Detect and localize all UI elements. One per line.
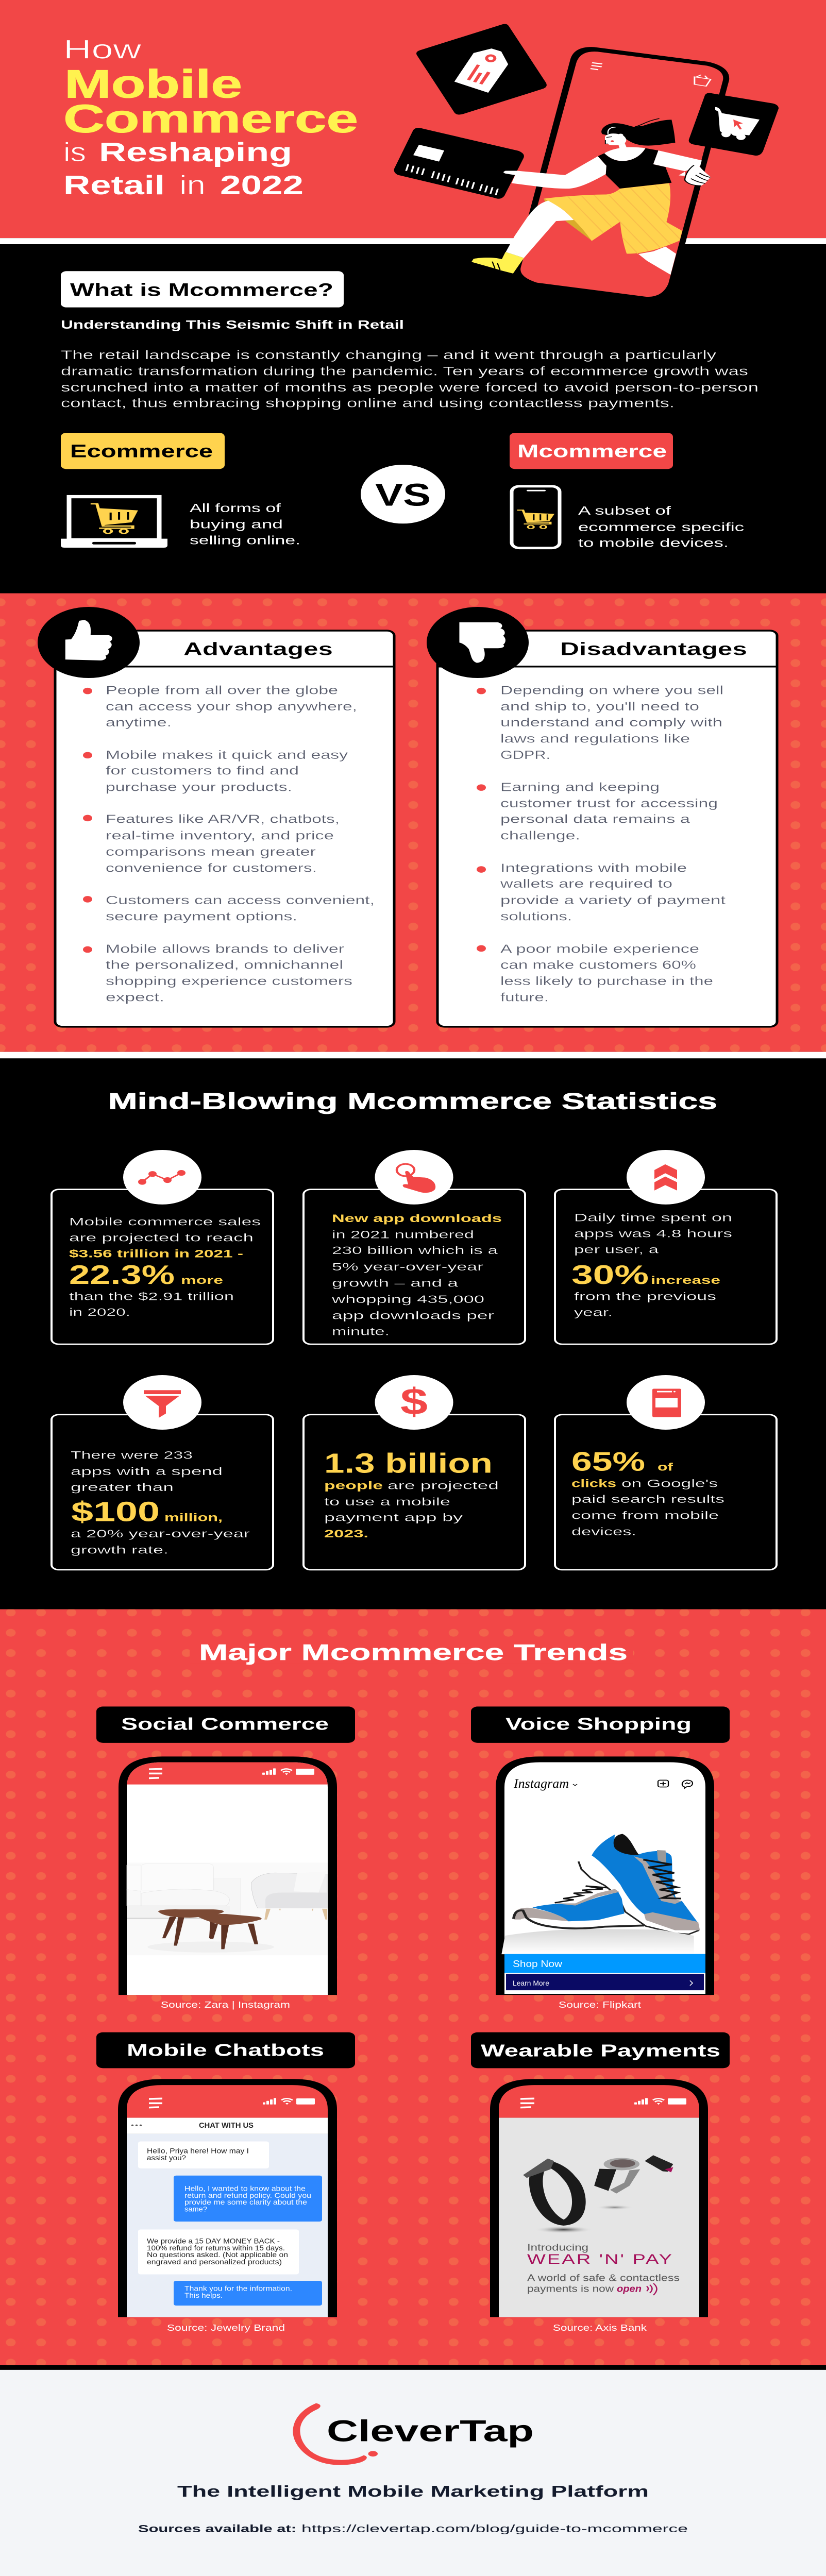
chat header <box>131 2125 133 2126</box>
phone mockup: A world of safe & contactless <box>527 2273 680 2283</box>
panel: disadvantages <box>427 607 777 1027</box>
mcommerce column: Mcommerce <box>517 442 667 461</box>
phone mockup: CHAT WITH US <box>199 2121 254 2129</box>
panel: footer <box>0 2370 826 2576</box>
stat card: daily time: per user, a <box>574 1243 659 1256</box>
skirt inner fold <box>544 199 592 241</box>
logo: clevertap: CleverTap <box>327 2414 534 2448</box>
bullet list: customer trust for accessing <box>500 797 718 810</box>
stat card: sales: than the $2.91 trillion <box>69 1290 234 1302</box>
description <box>578 504 744 550</box>
mcommerce column <box>510 433 744 550</box>
chat bubble 2: return and refund policy. Could you <box>184 2192 311 2199</box>
phone mockup: WEAR 'N' PAY <box>527 2251 672 2267</box>
intro paragraph: scrunched into a matter of months as people were forced to avoid person-to-person <box>61 381 758 394</box>
stat card: app downloads: 230 billion which is a <box>332 1244 498 1257</box>
shop now bar <box>504 1954 705 1973</box>
stat card: sales: in 2020. <box>69 1306 130 1318</box>
chat bubble 1 <box>138 2142 269 2168</box>
bullet list: understand and comply with <box>500 716 722 730</box>
arm holding card <box>503 156 606 189</box>
stat card: apps with spend <box>52 1375 273 1570</box>
stat card: sales: Mobile commerce sales <box>69 1215 261 1228</box>
description: All forms of <box>190 502 281 515</box>
label: Wearable Payments <box>481 2041 720 2060</box>
icon: menu <box>149 1768 162 1779</box>
photo: wearables <box>523 2155 673 2233</box>
chat bubble 3: engraved and personalized products) <box>147 2258 282 2266</box>
title: Reshaping <box>99 137 292 167</box>
woman running <box>471 118 711 275</box>
sources line: https://clevertap.com/blog/guide-to-mcommerce <box>301 2523 688 2535</box>
face <box>605 133 626 145</box>
label <box>471 1706 730 1743</box>
price tag card <box>416 24 547 115</box>
chat bubble 3: 100% refund for returns within 15 days. <box>147 2244 285 2252</box>
description: A subset of <box>578 504 671 518</box>
icon: dollar sign <box>375 1375 453 1430</box>
skirt <box>544 183 682 254</box>
stat card: apps with spend: a 20% year-over-year <box>71 1528 250 1540</box>
intro paragraph: contact, thus embracing shopping online and using contactless payments. <box>61 396 675 410</box>
bullet list: Customers can access convenient, <box>106 894 375 907</box>
bullet list: laws and regulations like <box>500 732 690 745</box>
title: is <box>63 137 86 167</box>
stat card: apps with spend: $100 <box>71 1497 160 1528</box>
stat card: sales <box>52 1150 273 1344</box>
heading: Disadvantages <box>560 639 747 659</box>
heading: Major Mcommerce Trends <box>199 1639 628 1665</box>
ecommerce column: Ecommerce <box>70 442 213 461</box>
bullet list: solutions. <box>500 910 572 923</box>
chat bubble 2 <box>174 2176 322 2222</box>
icon: thumbs up <box>38 607 140 678</box>
reflection <box>501 1929 694 1954</box>
bullet list: future. <box>500 991 549 1004</box>
bullet list: personal data remains a <box>500 812 690 826</box>
description: buying and <box>190 518 283 531</box>
phone mockup: open <box>617 2283 642 2294</box>
title: 2022 <box>220 170 304 200</box>
stat card: daily time: 30% <box>571 1260 649 1290</box>
phone mockup: payments is now <box>527 2283 614 2294</box>
panel: hero <box>0 0 826 301</box>
trend: wearable payments <box>471 2032 730 2333</box>
stat card: app downloads: New app downloads <box>332 1212 502 1225</box>
bullet list: convenience for customers. <box>106 861 317 875</box>
description: to mobile devices. <box>578 536 729 550</box>
chat bubble 3 <box>138 2229 299 2274</box>
icon: line chart <box>123 1150 201 1205</box>
phone mockup <box>119 1756 337 1995</box>
icon: menu <box>149 2098 162 2108</box>
panel: what is mcommerce <box>61 271 758 550</box>
chat bubble 1: assist you? <box>147 2154 186 2162</box>
bullet list: Earning and keeping <box>500 781 660 794</box>
chat bubble 3: No questions asked. (Not applicable on <box>147 2251 288 2259</box>
heading: Mind-Blowing Mcommerce Statistics <box>108 1088 717 1114</box>
trend: social commerce <box>96 1706 355 2010</box>
vs badge: VS <box>375 477 431 513</box>
phone mockup: Introducing <box>527 2242 588 2253</box>
stat card: clicks: clicks <box>571 1477 616 1489</box>
phone mockup: Learn More <box>513 1979 549 1987</box>
logo: clevertap <box>293 2403 534 2465</box>
stat card: clicks: of <box>658 1461 673 1473</box>
icon: status bar <box>262 1768 314 1775</box>
bullet list: less likely to purchase in the <box>500 975 713 988</box>
bullet list: People from all over the globe <box>106 684 338 697</box>
photo: blue sneakers <box>501 1834 700 1954</box>
stat card: app downloads: in 2021 numbered <box>332 1228 474 1241</box>
source: Source: Axis Bank <box>553 2323 647 2333</box>
label: Social Commerce <box>121 1715 329 1734</box>
stat card: clicks: paid search results <box>571 1493 724 1505</box>
stat card: sales: more <box>181 1274 223 1286</box>
phone mockup: Shop Now <box>513 1959 563 1969</box>
icon: status bar <box>263 2098 315 2105</box>
front leg <box>502 200 574 259</box>
bullet list: challenge. <box>500 829 580 842</box>
stat card: daily time <box>555 1150 777 1344</box>
description <box>190 502 300 547</box>
icon: phone with cart <box>512 486 560 548</box>
heading badge <box>61 271 344 308</box>
stat card: payment app users: are projected <box>387 1479 499 1492</box>
chat bubble 2: same? <box>184 2205 207 2213</box>
chat bubble 4: This helps. <box>184 2292 223 2299</box>
title: Retail <box>63 170 165 200</box>
chat bubble 2: provide me some clarity about the <box>184 2198 307 2206</box>
panel: advantages <box>38 607 394 1027</box>
stat card: sales: $3.56 trillion in 2021 - <box>69 1247 243 1260</box>
chat bubble 4 <box>174 2281 322 2306</box>
icon: laptop with cart <box>61 497 167 548</box>
vs badge <box>361 465 445 523</box>
hair <box>601 120 675 146</box>
stat card: sales: 22.3% <box>69 1260 175 1290</box>
trend: mobile chatbots <box>96 2032 355 2333</box>
stat card: daily time: increase <box>651 1274 720 1286</box>
stat card: payment app users <box>304 1375 525 1570</box>
stat card: app downloads: whopping 435,000 <box>331 1293 484 1306</box>
neck and chest <box>619 143 627 148</box>
stat card: clicks: come from mobile <box>571 1509 719 1521</box>
credit card <box>394 128 524 199</box>
back leg <box>638 247 676 275</box>
panel: advantages and disadvantages <box>0 594 826 1058</box>
stat card: clicks: devices. <box>571 1526 636 1538</box>
description: selling online. <box>190 534 300 547</box>
cart card <box>689 93 779 156</box>
stat card: apps with spend: There were 233 <box>71 1449 193 1461</box>
bullet list <box>83 684 375 1004</box>
stat card: apps with spend: million, <box>164 1511 223 1524</box>
bullet list <box>477 684 726 1004</box>
stat card: daily time: year. <box>574 1306 613 1319</box>
chat bubble 2: Hello, I wanted to know about the <box>184 2185 306 2193</box>
icon: menu <box>520 2098 534 2108</box>
shoe <box>471 252 524 274</box>
stat card: app downloads <box>304 1150 525 1344</box>
subheading: Understanding This Seismic Shift in Retail <box>61 318 404 331</box>
icon: dollar sign: $ <box>400 1381 428 1422</box>
upper shoe body <box>592 1835 697 1922</box>
panel: trends <box>0 1609 826 2365</box>
stat card: clicks: 65% <box>571 1446 645 1477</box>
stat card: app downloads: app downloads per <box>332 1309 494 1321</box>
title: Commerce <box>63 97 358 141</box>
stat card: app downloads: minute. <box>332 1325 390 1338</box>
stat card: apps with spend: greater than <box>71 1481 174 1494</box>
learn more bar <box>506 1974 704 1990</box>
floor <box>127 1920 328 1955</box>
phone mockup <box>490 2079 708 2317</box>
chat bubble 3: We provide a 15 DAY MONEY BACK - <box>147 2237 280 2245</box>
heading: Advantages <box>183 639 333 659</box>
bullet list: secure payment options. <box>106 910 297 923</box>
phone mockup: Instagram <box>513 1776 569 1791</box>
panel: statistics <box>52 1088 777 1570</box>
stat card: daily time: apps was 4.8 hours <box>574 1227 732 1240</box>
label: Voice Shopping <box>505 1715 692 1734</box>
bullet list: Mobile makes it quick and easy <box>106 749 348 762</box>
ecommerce column <box>61 433 300 548</box>
stat card: payment app users: payment app by <box>324 1511 463 1524</box>
trend: voice shopping <box>471 1706 730 2010</box>
sources line: Sources available at: <box>138 2523 296 2535</box>
label <box>96 2032 355 2068</box>
bullet list: can access your shop anywhere, <box>106 700 357 713</box>
label <box>471 2032 730 2068</box>
stat card: daily time: Daily time spent on <box>574 1211 732 1224</box>
intro paragraph <box>61 348 758 410</box>
source: Source: Zara | Instagram <box>161 2000 290 2010</box>
bullet list: A poor mobile experience <box>500 942 699 956</box>
icon: messenger <box>682 1780 693 1788</box>
icon: tapping hand <box>375 1150 453 1205</box>
bullet list: and ship to, you'll need to <box>500 700 699 713</box>
stat card: clicks: on Google's <box>621 1477 718 1489</box>
label: Mobile Chatbots <box>127 2041 324 2060</box>
tagline: The Intelligent Mobile Marketing Platform <box>177 2483 649 2500</box>
heading badge: What is Mcommerce? <box>70 280 333 300</box>
phone mockup <box>118 2079 337 2317</box>
intro paragraph: The retail landscape is constantly changing – and it went through a particularly <box>61 348 716 362</box>
icon: add post <box>658 1780 668 1787</box>
stat card: apps with spend: growth rate. <box>71 1544 168 1556</box>
tables <box>162 1916 216 1945</box>
chat bubble 4: Thank you for the information. <box>184 2284 292 2293</box>
bullet list: shopping experience customers <box>106 975 352 988</box>
bullet list: Depending on where you sell <box>500 684 723 697</box>
stat card: clicks <box>555 1375 777 1570</box>
bullet list: purchase your products. <box>106 781 292 794</box>
title: Mobile <box>64 62 242 107</box>
upper shoe sole <box>579 1851 700 1933</box>
stat card: apps with spend: apps with a spend <box>71 1465 223 1478</box>
bullet list: can make customers 60% <box>500 958 696 972</box>
icon: contactless waves <box>647 2283 656 2295</box>
bullet list: wallets are required to <box>500 877 672 891</box>
stat card: payment app users: 1.3 billion <box>324 1448 493 1479</box>
icon: funnel <box>123 1375 201 1430</box>
icon: double chevron up <box>627 1150 705 1205</box>
hero illustration <box>394 24 779 301</box>
bullet list: real-time inventory, and price <box>106 829 334 842</box>
section background <box>0 594 826 1052</box>
stat card: app downloads: 5% year-over-year <box>332 1261 483 1273</box>
stat card: payment app users: 2023. <box>324 1528 368 1540</box>
phone mockup <box>496 1756 714 1995</box>
bullet list: anytime. <box>106 716 172 730</box>
icon: thumbs down <box>427 607 529 678</box>
bullet list: Mobile allows brands to deliver <box>106 942 344 956</box>
intro paragraph: dramatic transformation during the pandemic. Ten years of ecommerce growth was <box>61 364 748 378</box>
bullet list: Features like AR/VR, chatbots, <box>106 812 340 826</box>
source: Source: Flipkart <box>559 2000 641 2010</box>
chat bubble 1: Hello, Priya here! How may I <box>147 2147 249 2155</box>
title <box>63 35 358 200</box>
title: How <box>63 35 142 64</box>
stat card: app downloads: growth – and a <box>332 1277 458 1289</box>
source: Source: Jewelry Brand <box>167 2323 285 2333</box>
white band <box>0 238 826 244</box>
stat card: sales: are projected to reach <box>69 1231 254 1244</box>
bullet list: Integrations with mobile <box>500 861 687 875</box>
icon: small phone <box>627 1375 705 1430</box>
photo: living room <box>127 1862 328 1921</box>
arm holding phone <box>653 150 702 171</box>
footer background <box>0 2370 826 2576</box>
bullet list: for customers to find and <box>106 764 299 777</box>
bullet list: provide a variety of payment <box>500 894 726 907</box>
sources line <box>138 2523 688 2535</box>
bullet list: the personalized, omnichannel <box>106 958 343 972</box>
section background <box>0 1609 826 2365</box>
top <box>598 148 671 189</box>
large phone <box>515 47 729 301</box>
stat card: payment app users: people <box>324 1479 383 1492</box>
lower shoe <box>531 1914 643 1928</box>
description: ecommerce specific <box>578 521 744 534</box>
stat card: daily time: from the previous <box>574 1290 716 1302</box>
hero background <box>0 0 826 238</box>
bullet list: comparisons mean greater <box>106 845 316 859</box>
stat card: payment app users: to use a mobile <box>324 1496 450 1508</box>
title: in <box>179 170 206 200</box>
icon: status bar <box>634 2098 686 2105</box>
bullet list: GDPR. <box>500 749 550 762</box>
bullet list: expect. <box>106 991 164 1004</box>
label <box>96 1706 355 1743</box>
